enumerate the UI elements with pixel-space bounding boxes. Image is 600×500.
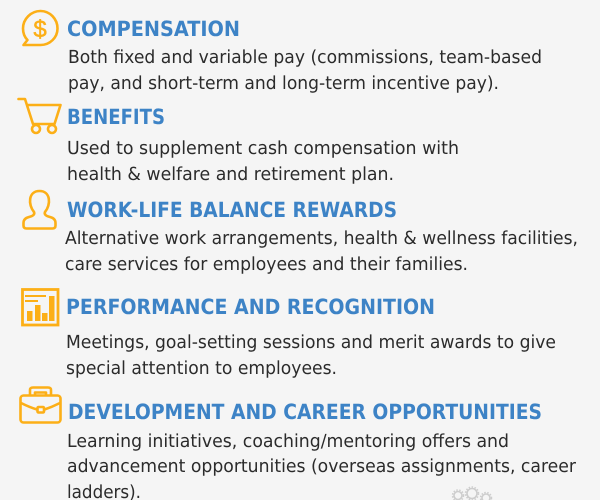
text: performance description: Meetings, goal-setting sessions and merit awards to give <box>66 332 556 353</box>
section: compensation <box>67 17 542 94</box>
text: benefits description: health & welfare and retirement plan. <box>67 164 394 185</box>
icon: person <box>24 191 56 228</box>
section: performance and recognition <box>66 295 556 379</box>
heading: work-life balance rewards: WORK-LIFE BALANCE REWARDS <box>67 198 397 222</box>
text: performance description: special attention to employees. <box>66 358 337 379</box>
heading: compensation: COMPENSATION <box>67 17 240 41</box>
text: performance description <box>66 332 556 379</box>
text: work-life description: care services for employees and their families. <box>65 254 468 275</box>
section: work-life balance rewards <box>65 198 578 275</box>
section: development and career opportunities <box>67 400 577 500</box>
text: compensation description: Both fixed and variable pay (commissions, team-based <box>68 47 542 68</box>
text: development description: Learning initiatives, coaching/mentoring offers and <box>67 431 509 452</box>
text: development description <box>67 431 577 500</box>
text: work-life description: Alternative work arrangements, health & wellness facilities, <box>65 228 578 249</box>
text: benefits description <box>67 138 459 185</box>
icon: dollar speech bubble: $ <box>33 16 47 43</box>
icon: gears <box>452 487 492 500</box>
text: compensation description: pay, and short-term and long-term incentive pay). <box>68 73 499 94</box>
icon: bar chart <box>22 290 58 325</box>
text: benefits description: Used to supplement cash compensation with <box>67 138 459 159</box>
section: benefits <box>67 105 459 185</box>
icon: dollar speech bubble <box>23 11 58 45</box>
text: development description: advancement opportunities (overseas assignments, career <box>67 456 577 477</box>
icon: briefcase <box>20 388 60 422</box>
text: compensation description <box>68 47 542 94</box>
heading: development and career opportunities: DEVELOPMENT AND CAREER OPPORTUNITIES <box>68 400 542 424</box>
text: work-life description <box>65 228 578 275</box>
heading: performance and recognition: PERFORMANCE AND RECOGNITION <box>66 295 435 319</box>
icon: shopping cart <box>18 99 60 133</box>
heading: benefits: BENEFITS <box>67 105 165 129</box>
